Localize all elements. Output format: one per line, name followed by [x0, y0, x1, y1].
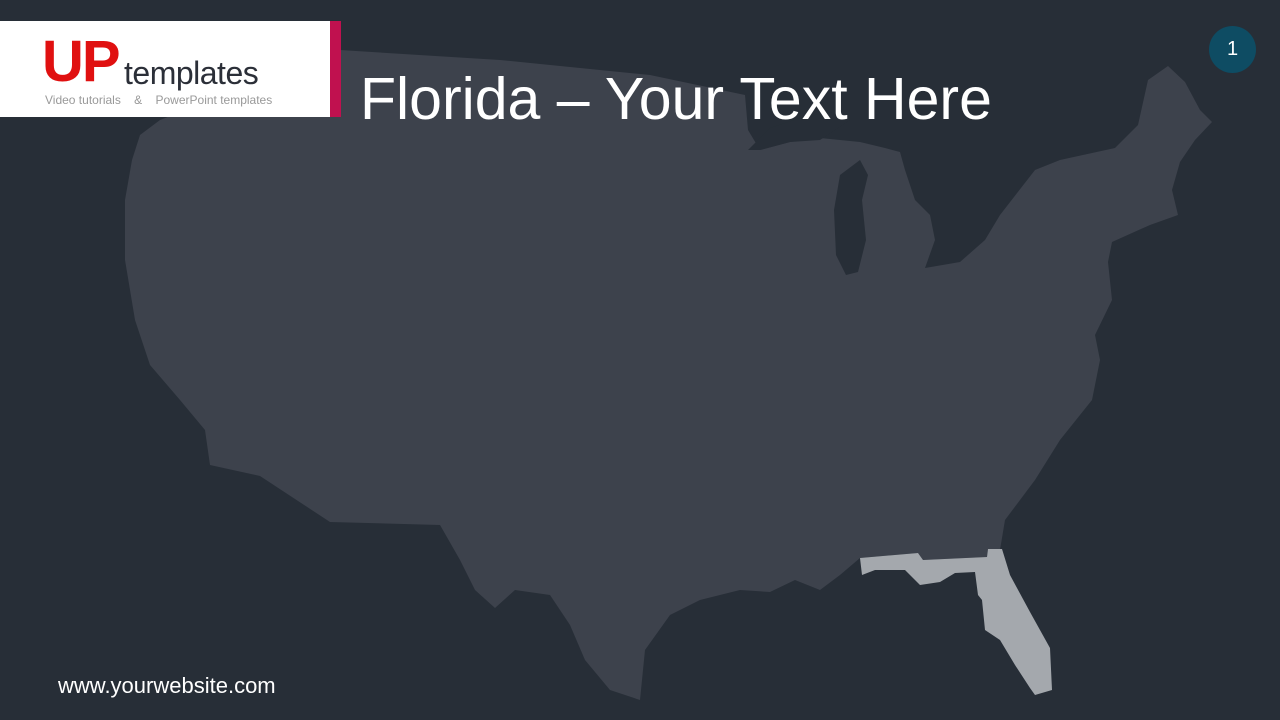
lake superior — [748, 112, 850, 150]
accent bar — [330, 21, 341, 117]
footer website: www.yourwebsite.com — [58, 673, 276, 698]
logo text UP: UP — [42, 29, 119, 94]
logo tagline: Video tutorials & PowerPoint templates — [45, 93, 272, 107]
icon: florida highlighted — [860, 549, 1052, 695]
title: Florida – Your Text Here — [360, 66, 992, 132]
page number badge — [1209, 26, 1256, 73]
logo text templates: templates — [124, 55, 258, 91]
lake michigan — [834, 160, 868, 275]
logo panel — [0, 21, 330, 117]
page number badge: 1 — [1227, 38, 1238, 60]
